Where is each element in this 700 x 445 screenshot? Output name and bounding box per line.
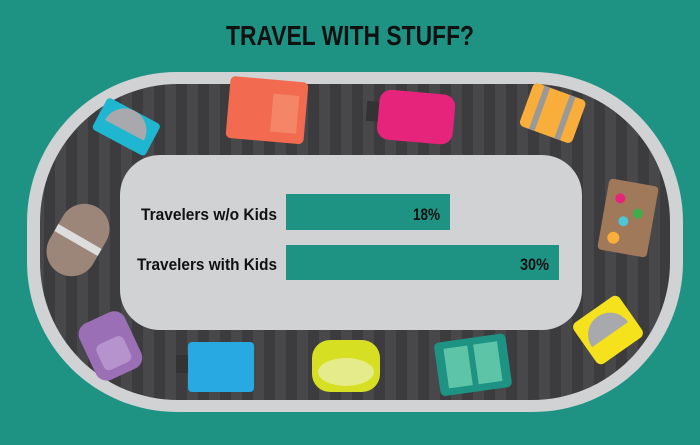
icon: teal suitcase [434, 333, 512, 397]
bar chart [137, 194, 559, 280]
icon: yellow bag [571, 293, 645, 367]
label: travelers with kids: Travelers with Kids [137, 255, 277, 274]
bar: 18% [286, 194, 450, 230]
icon: lime bag [312, 340, 380, 392]
icon: grey duffel [37, 195, 119, 285]
carousel track [40, 84, 670, 400]
icon: purple backpack [75, 307, 146, 385]
icon: brown sticker suitcase [597, 178, 659, 258]
value: 30%: 30% [520, 255, 549, 274]
icon: orange suitcase [225, 76, 309, 144]
icon: pink suitcase [364, 88, 456, 145]
icon: blue suitcase [176, 342, 254, 392]
value: 18%: 18% [413, 205, 440, 224]
bar: 30% [286, 245, 559, 280]
carousel outer rim [27, 72, 683, 412]
icon: yellow suitcase [519, 82, 587, 144]
title: TRAVEL WITH STUFF? [226, 20, 474, 51]
icon: blue bag [91, 97, 161, 157]
inner panel [120, 155, 582, 330]
label: travelers without kids: Travelers w/o Kids [141, 205, 277, 224]
